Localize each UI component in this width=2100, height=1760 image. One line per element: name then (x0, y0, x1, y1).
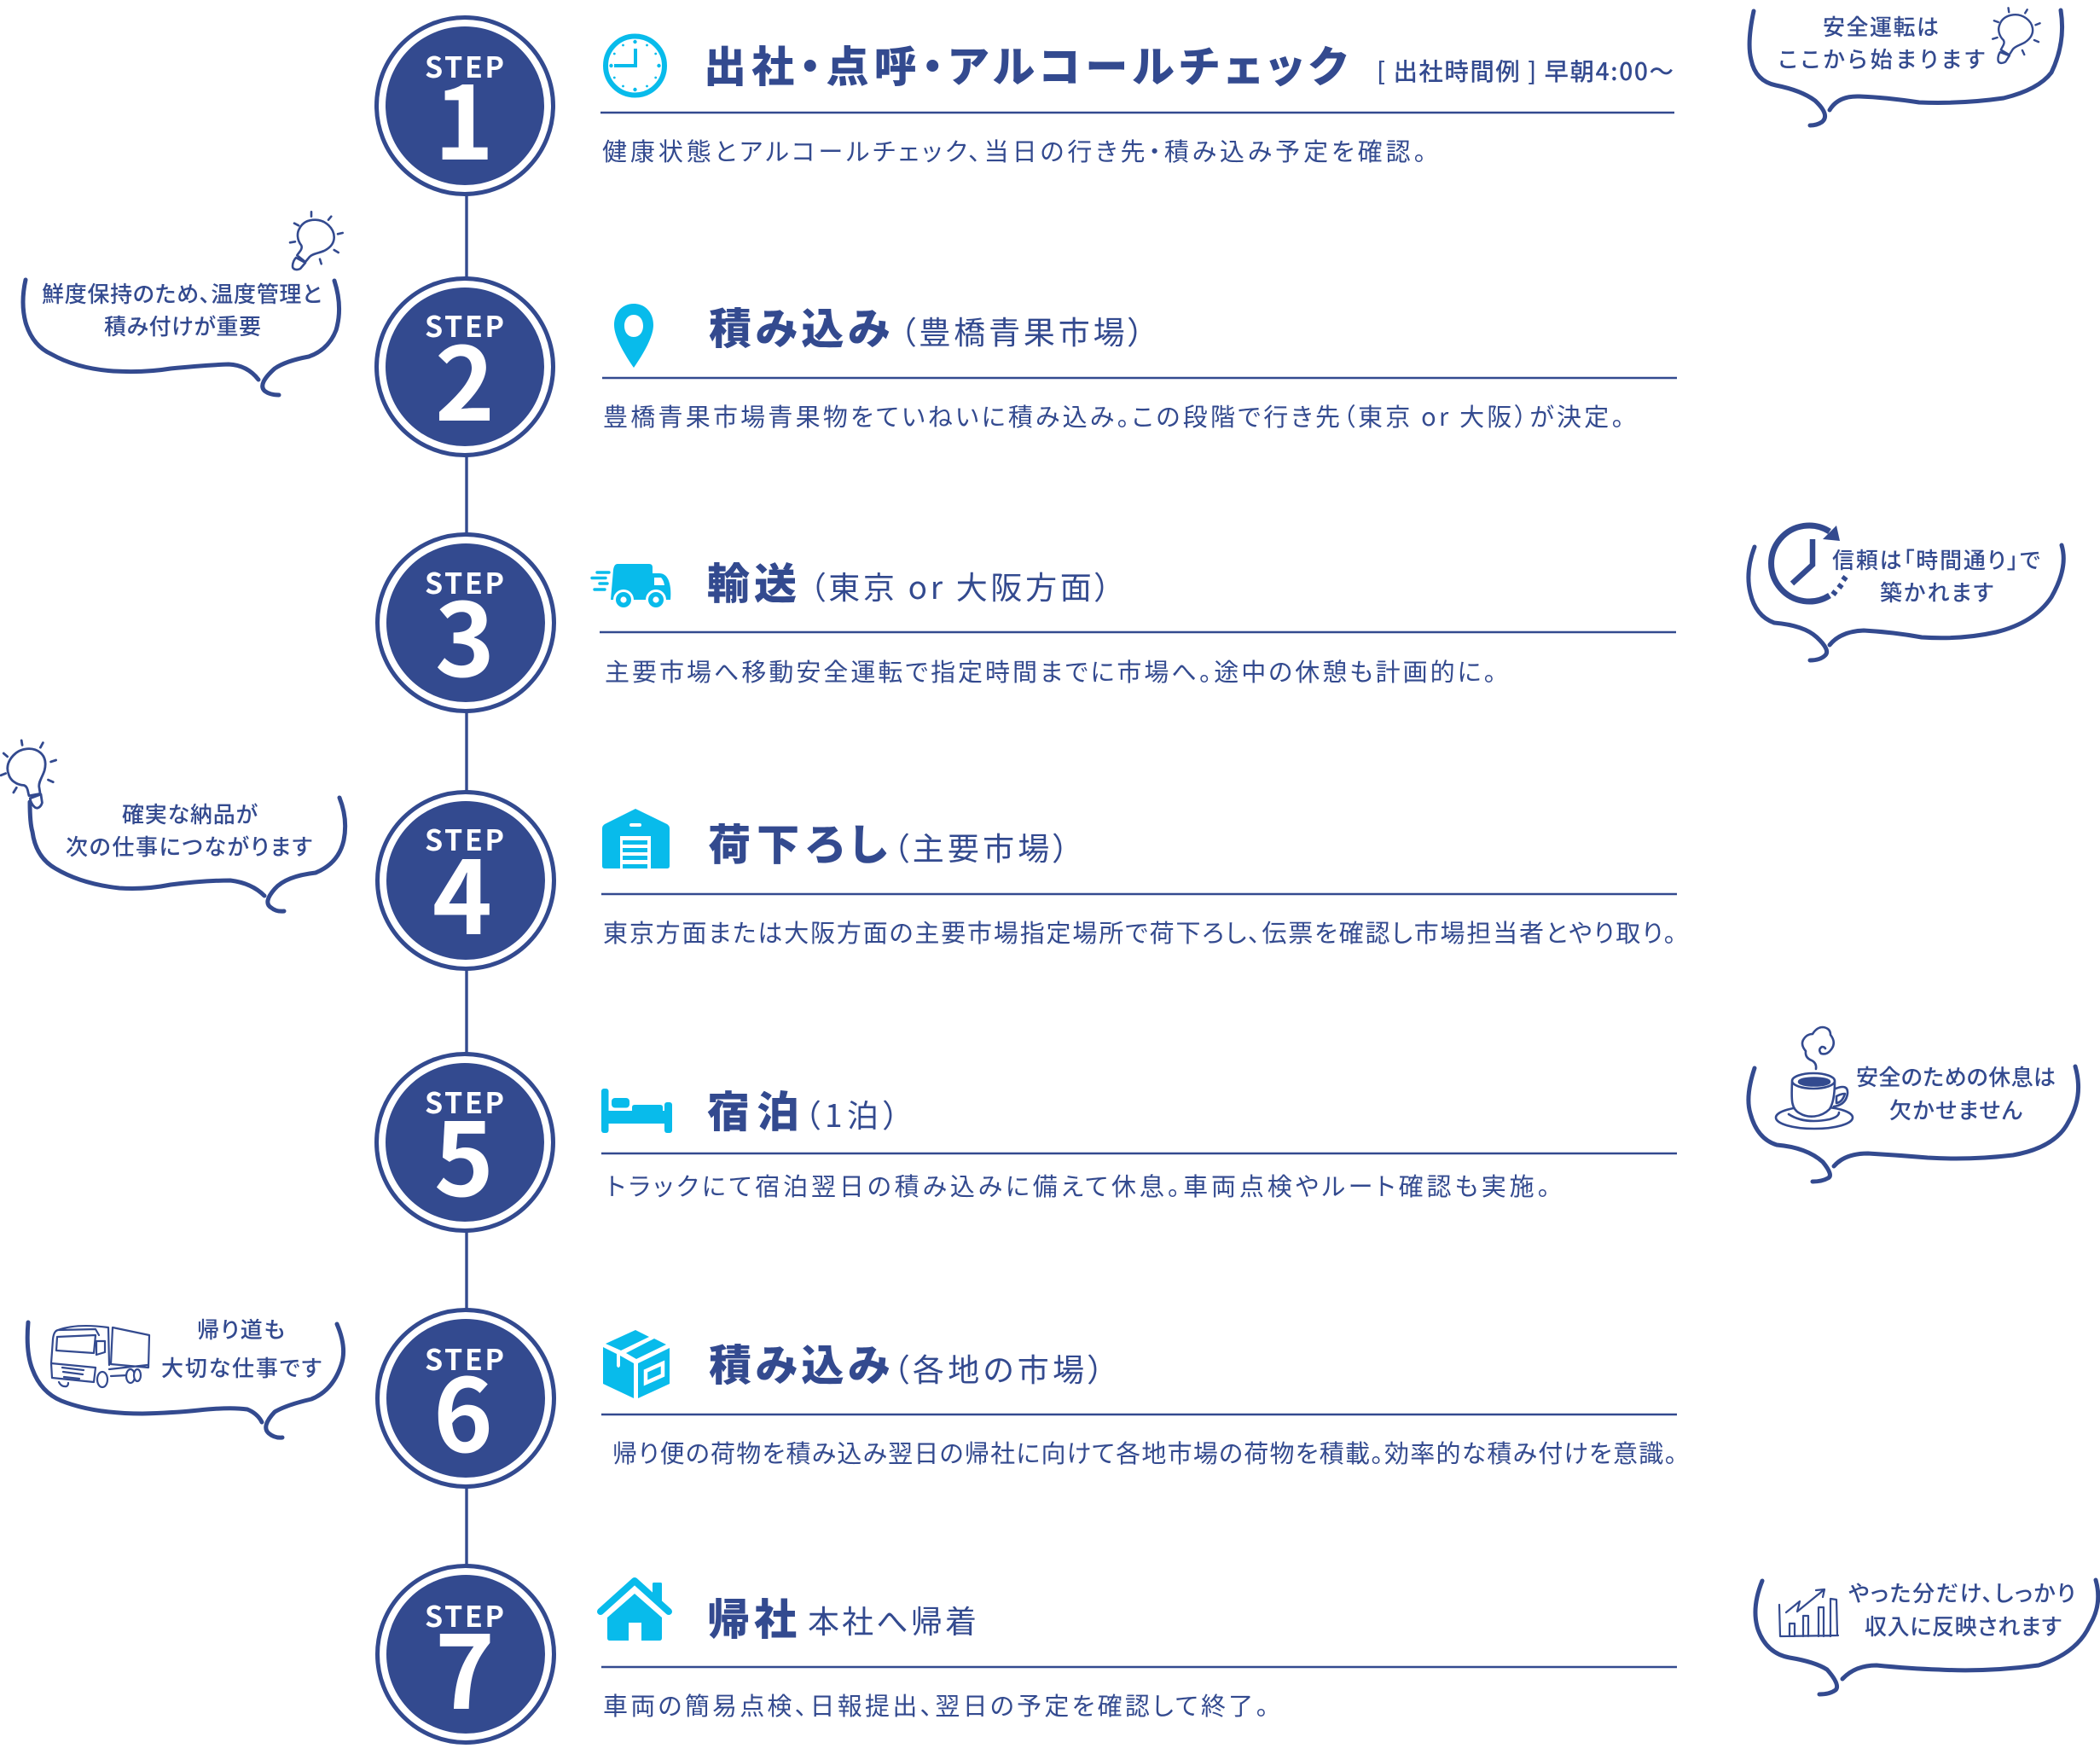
step 1 badge: STEP (425, 44, 504, 86)
callout: reliability (1749, 526, 2063, 660)
step 6 badge (377, 1310, 554, 1486)
callout: pay: 収入に反映されます (1865, 1610, 2062, 1641)
step 3 row (377, 534, 1676, 712)
heading: step 7: 帰社 (707, 1586, 797, 1647)
step 3 badge (377, 534, 554, 712)
heading: step 5: 宿泊 (707, 1078, 799, 1140)
subheading: step 6: （各地の市場） (893, 1345, 1104, 1391)
icon: bed (601, 1089, 672, 1133)
step 5 badge: STEP (425, 1080, 504, 1122)
callout: safe driving: 安全運転は (1823, 10, 1939, 42)
description: step 4: 東京方面または大阪方面の主要市場指定場所で荷下ろし、伝票を確認し市場担当者とやり取り。 (603, 914, 1676, 950)
step 7 badge: 7 (435, 1592, 495, 1739)
heading: step 2: 積み込み (709, 295, 890, 357)
step 6 badge: 6 (433, 1335, 493, 1482)
callout: reliable delivery: 確実な納品が (122, 798, 258, 829)
callout: way home (27, 1313, 344, 1438)
callout: reliability: 築かれます (1880, 576, 1993, 607)
step 5 row (377, 1054, 1677, 1230)
description: step 2: 豊橋青果市場青果物をていねいに積み込み。この段階で行き先（東京 or 大阪）が決定。 (603, 398, 1624, 433)
subheading: step 7: 本社へ帰着 (808, 1596, 977, 1642)
icon: rising chart (1779, 1589, 1838, 1636)
description: step 1: 健康状態とアルコールチェック、当日の行き先・積み込み予定を確認。 (602, 132, 1426, 168)
callout: rest: 安全のための休息は (1856, 1060, 2056, 1092)
subheading: step 4: （主要市場） (893, 823, 1069, 869)
icon: cardboard box (603, 1330, 670, 1398)
callout: way home: 大切な仕事です (161, 1351, 322, 1383)
step 2 badge (377, 278, 553, 456)
heading: step 3: 輸送 (707, 550, 797, 612)
subheading: step 5: （1泊） (804, 1090, 899, 1136)
step 3 badge: STEP (425, 561, 504, 602)
icon: truck line art (51, 1326, 149, 1387)
callout: pay: やった分だけ、しっかり (1848, 1577, 2075, 1608)
heading: step 6: 積み込み (709, 1332, 890, 1393)
icon: clock with arrow (1772, 526, 1846, 601)
icon: warehouse (602, 809, 670, 868)
icon: light bulb (1989, 4, 2045, 64)
callout: safe driving: ここから始まります (1778, 43, 1985, 74)
step 5 badge (377, 1054, 553, 1230)
step 6 row (377, 1310, 1677, 1486)
step 4 badge: 4 (432, 817, 492, 964)
step 1 badge (377, 17, 553, 195)
callout: reliable delivery (0, 728, 345, 911)
step 3 badge: 3 (435, 560, 495, 706)
callout: freshness: 積み付けが重要 (104, 310, 261, 341)
subheading: step 3: （東京 or 大阪方面） (809, 562, 1111, 608)
step 2 badge: STEP (425, 304, 504, 346)
description: step 5: トラックにて宿泊翌日の積み込みに備えて休息。車両点検やルート確認も実施。 (606, 1167, 1550, 1203)
step 1 row (377, 17, 1674, 195)
step 7 badge: STEP (425, 1594, 504, 1635)
callout: safe driving (1749, 4, 2062, 125)
step 7 row (377, 1566, 1677, 1742)
callout: way home: 帰り道も (197, 1313, 285, 1345)
step 7 badge (377, 1566, 554, 1742)
icon: light bulb (290, 212, 343, 270)
heading: step 1: 出社・点呼・アルコールチェック (704, 33, 1347, 95)
step 4 row (377, 792, 1677, 969)
step 5 badge: 5 (434, 1079, 494, 1226)
icon: light bulb (0, 728, 73, 811)
callout: freshness (23, 212, 343, 395)
callout: reliable delivery: 次の仕事につながります (66, 830, 312, 862)
icon: clock (606, 36, 664, 96)
callout: freshness: 鮮度保持のため、温度管理と (42, 277, 322, 309)
callout: rest: 欠かせません (1889, 1094, 2022, 1125)
callout: reliability: 信頼は「時間通り」で (1832, 543, 2040, 575)
timeline connector (465, 195, 468, 1570)
step 6 badge: STEP (425, 1337, 504, 1379)
step 2 row (377, 278, 1677, 456)
callout: pay (1755, 1577, 2098, 1694)
icon: house (600, 1581, 669, 1641)
icon: moving truck (592, 564, 670, 610)
description: step 3: 主要市場へ移動安全運転で指定時間までに市場へ。途中の休憩も計画的に。 (605, 653, 1496, 688)
heading: step 4: 荷下ろし (708, 811, 887, 873)
step 2 badge: 2 (435, 304, 495, 450)
subheading: step 2: （豊橋青果市場） (900, 307, 1144, 353)
step 4 badge: STEP (425, 817, 504, 859)
step 1 badge: 1 (434, 43, 494, 189)
description: step 6: 帰り便の荷物を積み込み翌日の帰社に向けて各地市場の荷物を積載。効率的な積み付けを意識。 (612, 1434, 1677, 1470)
icon: map pin (614, 304, 653, 368)
note: departure time: [ 出社時間例 ] 早朝4:00〜 (1377, 53, 1674, 88)
callout: rest (1749, 1027, 2079, 1182)
step 4 badge (377, 792, 554, 969)
icon: coffee cup (1776, 1027, 1853, 1129)
description: step 7: 車両の簡易点検、日報提出、翌日の予定を確認して終了。 (603, 1687, 1268, 1722)
